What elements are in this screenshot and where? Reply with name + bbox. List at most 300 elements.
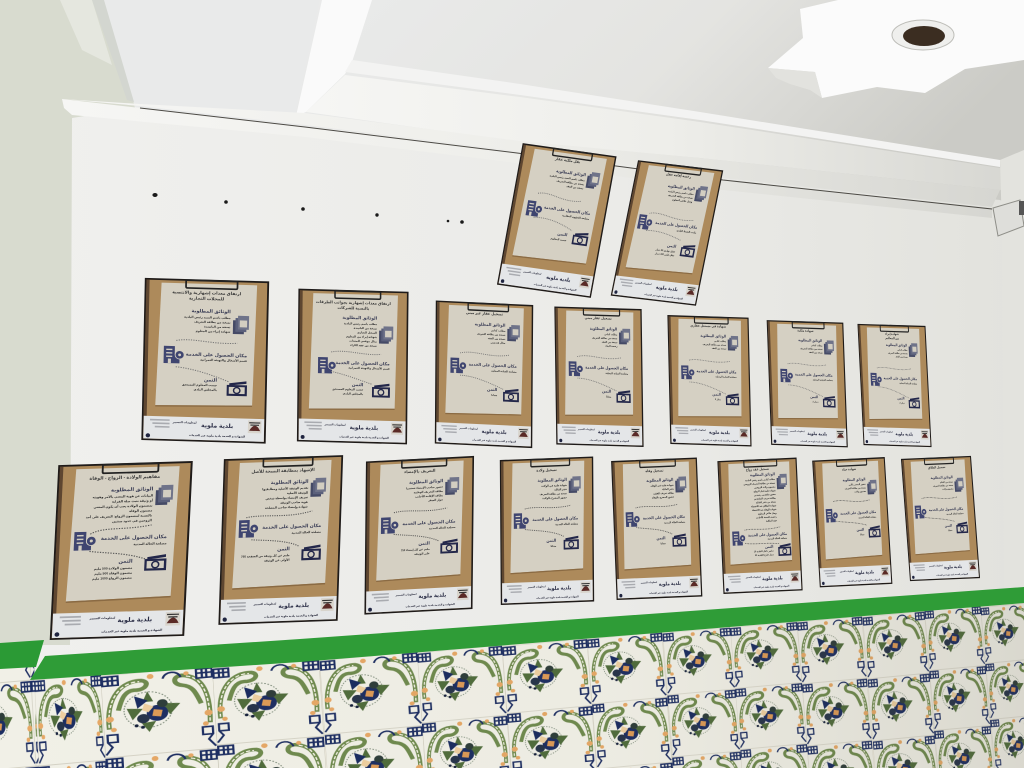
required documents — [548, 166, 600, 192]
price — [856, 525, 881, 538]
footer: بلدية ملوية — [278, 603, 309, 610]
service location — [732, 529, 788, 546]
footer — [789, 430, 835, 444]
dotted route — [922, 496, 957, 500]
service location: قسم الأشغال والتهيئة العمرانية — [200, 358, 247, 363]
board: row 1, property transfer — [498, 143, 616, 297]
required documents — [646, 476, 687, 500]
required documents: حضور المعني بالأمر — [848, 482, 866, 487]
board title: مفاهيم الولادة - الزواج - الوفاة — [89, 474, 160, 481]
required documents: وصل خلاص المعلوم — [672, 198, 693, 204]
ceiling panel — [103, 0, 320, 125]
price: مضمون الزواج 1000 مليم — [92, 576, 132, 581]
footer: بلدية ملوية — [709, 429, 730, 435]
board: row 3, signature certification — [365, 456, 473, 614]
required documents: الوثائق المطلوبة — [409, 478, 444, 485]
footer: الشهادة و الخدمة بلدية ملوية عبر الخدمات — [264, 614, 318, 619]
dotted route — [331, 351, 381, 355]
service location: مكان الحصول على الخدمة — [469, 361, 517, 369]
required documents: أو وثيقة تثبت صلة القرابة — [112, 498, 153, 504]
board title: التعريف بالإمضاء — [404, 469, 435, 475]
required documents: نسخة من بطاقة التعريف — [556, 179, 584, 186]
service location: مكتب الضبط البلدي — [676, 229, 697, 235]
price: حسب المعلوم المستحق — [182, 382, 217, 387]
required documents: تقديم الوثيقة الأصلية ومطابقتها — [262, 486, 308, 491]
required documents — [406, 477, 459, 503]
price — [92, 554, 167, 581]
required documents: مطلب باسم السيد رئيس البلدية — [184, 315, 231, 320]
dotted route — [636, 526, 672, 535]
board title: تسجيل وفاة — [645, 468, 664, 473]
required documents: الوثائق المطلوبة — [886, 343, 907, 348]
board title — [885, 331, 899, 341]
price — [550, 228, 589, 246]
footer: الشهادة و الخدمة بلدية ملوية عبر الخدمات — [800, 440, 835, 444]
board: row 2, property use certificate — [668, 315, 751, 446]
service location: مصلحة الحالة المدنية — [133, 541, 167, 546]
price: حفل ليلي 100 دينار — [654, 252, 675, 257]
footer: الشهادة و الخدمة بلدية ملوية عبر الخدمات — [701, 438, 738, 443]
required documents: الوثائق المطلوبة — [271, 479, 309, 485]
required documents: مطلب كتابي — [897, 348, 908, 352]
service location: مكان الحصول على الخدمة — [544, 204, 591, 216]
required documents: رخصة بالنسبة للأجانب — [756, 514, 778, 519]
required documents: مضمون ولادة — [855, 490, 867, 494]
required documents: بطاقة تعريف الشاهدين — [754, 496, 776, 501]
required documents — [886, 342, 918, 359]
price: 2 دينار — [900, 403, 905, 405]
required documents: عقد الملكية — [766, 519, 778, 523]
footer: الشهادة و الخدمة بلدية ملوية عبر الخدمات — [339, 435, 389, 440]
dotted route — [744, 527, 780, 530]
board title: ارتفاق معدات إشهارية بجوانب الطرقات — [316, 299, 391, 307]
footer: لمعلومات التسيير — [745, 575, 761, 579]
price: مجانا — [551, 545, 557, 548]
service location — [318, 357, 390, 375]
price — [944, 522, 968, 534]
service location: مصلحة الحالة المدنية — [946, 513, 964, 516]
dotted route — [690, 382, 726, 394]
board: row 2, roadside advertising — [298, 289, 408, 444]
price — [656, 533, 687, 547]
dotted route — [394, 508, 447, 513]
price: الثمن — [557, 231, 568, 237]
required documents: شهادة طبية قبل الزواج — [754, 489, 776, 493]
footer: لمعلومات التسيير — [527, 585, 546, 589]
footer: الشهادة و الخدمة بلدية ملوية عبر الخدمات — [847, 578, 881, 583]
footer: الشهادة و الخدمة بلدية ملوية عبر الخدمات — [589, 439, 629, 443]
required documents: شهادة إبراء من المعلوم — [196, 329, 231, 334]
price: مضمون الولادة 500 مليم — [94, 566, 132, 571]
required documents: نسخة من بطاقة التعريف — [800, 347, 823, 351]
required documents: الوثائق المطلوبة — [798, 338, 822, 343]
required documents: مثال موقعي للمعدات — [349, 340, 377, 343]
footer — [88, 614, 163, 634]
board title: بالنسبة للشركات — [337, 305, 370, 311]
footer: بلدية ملوية — [546, 274, 571, 284]
board: row 3, birth registration — [500, 457, 593, 604]
footer: لمعلومات التسيير — [928, 565, 943, 568]
price: الثمن — [204, 377, 218, 384]
required documents: الزوجين في حدود سنتين — [112, 518, 152, 523]
price: 10 دنانير داخل البلدية — [754, 549, 775, 553]
price: الثمن — [810, 395, 818, 399]
required documents: حضور المصرح بالوفاة — [652, 495, 674, 500]
ceiling frame ribbon — [345, 60, 1000, 167]
price: 750 مليم عن كل إمضاء — [401, 547, 430, 552]
required documents — [798, 338, 834, 355]
required documents: نسخة من الحكم — [940, 480, 953, 484]
service location: مصلحة الحالة المدنية — [429, 526, 456, 530]
required documents: حضور شاهدين رشيدين — [754, 493, 776, 497]
board title: تسجيل عقار غير مبني — [466, 311, 504, 317]
left wall section — [0, 0, 135, 645]
footer: الشهادة و الخدمة بلدية ملوية عبر الخدمات — [536, 595, 579, 600]
board title: الإشهاد بمطابقة النسخة للأصل — [251, 467, 315, 474]
dotted route — [537, 192, 582, 202]
right wall corner — [1000, 150, 1024, 590]
service location — [637, 214, 699, 235]
service location: مكان الحصول على الخدمة — [335, 360, 390, 366]
board: row 3, certified copy — [219, 455, 342, 624]
board: row 1, event permit — [611, 160, 723, 305]
price: الثمن — [656, 536, 666, 541]
required documents: نسخة من بطاقة التعريف — [477, 332, 505, 337]
footer: الشهادة و الخدمة بلدية ملوية عبر الخدمات — [936, 572, 969, 577]
footer — [323, 423, 389, 440]
service location — [826, 507, 877, 523]
required documents: البيانات عن هوية المعني بالأمر وهويته — [92, 494, 153, 499]
required documents — [930, 474, 964, 493]
footer — [632, 281, 686, 301]
price: الثمن — [944, 523, 952, 528]
board title — [172, 289, 242, 302]
footer: بلدية ملوية — [481, 429, 507, 436]
price: بالمجلس البلدي — [194, 387, 217, 392]
footer: بلدية ملوية — [855, 569, 874, 575]
service location — [74, 529, 167, 551]
dotted route — [525, 505, 571, 509]
board title: تسجيل عقد زواج — [746, 467, 769, 472]
footer: بلدية ملوية — [659, 580, 681, 587]
service location: مكان الحصول على الخدمة — [532, 515, 579, 522]
footer: لمعلومات التسيير — [577, 428, 595, 431]
ceiling light — [892, 20, 954, 50]
dotted route — [578, 378, 616, 391]
board title: من المعاليم — [885, 336, 899, 341]
dotted route — [460, 375, 503, 389]
required documents: نسخة من العقد — [602, 341, 618, 344]
required documents: الوثائق المطلوبة — [342, 315, 378, 321]
service location: مكان الحصول على الخدمة — [929, 506, 964, 513]
tiled dado — [0, 603, 1024, 768]
price: الثمن — [277, 546, 290, 552]
required documents: الوثائق المطلوبة — [667, 184, 695, 191]
price — [182, 377, 247, 396]
ceiling molding — [296, 0, 372, 116]
service location: مصلحة الجباية المحلية — [715, 375, 737, 379]
price — [401, 539, 458, 557]
required documents: نسخة من بطاقة التعريف — [592, 336, 617, 340]
price — [712, 392, 739, 405]
footer — [689, 428, 738, 443]
price — [654, 241, 696, 260]
price: الثمن — [897, 396, 905, 401]
required documents: نسخة من بطاقة التعريف — [540, 492, 567, 496]
dotted route — [175, 367, 230, 382]
dotted route — [689, 359, 730, 363]
dotted route — [90, 525, 152, 534]
price: حفل نهاري 50 دينار — [654, 248, 676, 254]
footer: لمعلومات التسيير — [789, 431, 805, 433]
required documents: الوثائق المطلوبة — [556, 168, 586, 177]
required documents: شهادة وإمضاء صاحب المصلحة — [265, 504, 308, 510]
required documents: مطلب كتابي — [811, 344, 823, 347]
service location: مصلحة الجباية المحلية — [491, 370, 517, 374]
dotted route — [525, 528, 564, 538]
footer: بلدية ملوية — [895, 432, 914, 437]
required documents: نسخة من بطاقة التعريف — [703, 343, 726, 347]
required documents: الوثائق المطلوبة — [537, 477, 567, 483]
dotted route — [788, 363, 826, 366]
price: 2 دينار — [813, 400, 819, 404]
junction box — [993, 200, 1024, 236]
required documents: نسخة من بطاقة التعريف — [668, 194, 693, 200]
service location: مكان الحصول على الخدمة — [101, 534, 167, 542]
dotted route — [394, 532, 438, 543]
required documents: نسخة من بطاقة التعريف — [888, 351, 908, 355]
board: row 2, ownership certificate — [767, 320, 847, 447]
required documents — [184, 308, 249, 334]
required documents: مطلب كتابي — [714, 340, 727, 343]
price — [546, 536, 579, 550]
price — [810, 395, 836, 408]
required documents: شهادة طبية في الوفاة — [651, 484, 674, 488]
panel shadow edge — [92, 0, 134, 102]
price — [241, 544, 321, 563]
service location — [915, 504, 965, 519]
footer: بلدية ملوية — [655, 284, 679, 292]
dotted route — [577, 355, 621, 359]
footer: لمعلومات التسيير — [324, 423, 346, 427]
footer: بلدية ملوية — [807, 431, 828, 437]
required documents: الوثائق المطلوبة — [111, 486, 154, 494]
price: الثمن — [667, 244, 677, 249]
service location: مكان الحصول على الخدمة — [655, 221, 698, 230]
required documents: نسخة من العقد — [809, 351, 823, 355]
board title — [316, 299, 391, 311]
footer: الشهادة و الخدمة بلدية ملوية عبر الخدمات — [101, 628, 162, 634]
required documents: الوثائق المطلوبة — [750, 472, 775, 477]
footer: لمعلومات التسيير — [172, 421, 197, 425]
required documents: الوثائق المطلوبة — [646, 478, 673, 483]
dotted route — [836, 520, 867, 527]
price: الثمن — [602, 389, 611, 394]
service location: مكان الحصول على الخدمة — [643, 515, 685, 521]
required documents: شهادة الطلاق عند الاقتضاء — [751, 504, 776, 508]
ceiling star fixture — [768, 0, 1024, 98]
footer: بلدية ملوية — [944, 563, 963, 570]
price: مجانا — [660, 542, 666, 545]
footer: بلدية ملوية — [418, 593, 446, 600]
price: الثمن — [418, 540, 430, 546]
board title: شهادة ملكية — [797, 328, 814, 333]
footer — [395, 591, 455, 609]
required documents: مطلب باسم رئيس البلدية — [668, 190, 695, 196]
price: الثمن — [118, 559, 133, 565]
board title: للمحلات التجارية — [189, 296, 225, 301]
required documents: للوثيقة الأصلية — [287, 490, 308, 495]
required documents: نسخة من العقد — [895, 355, 908, 359]
cornice — [62, 99, 1000, 207]
board: row 3, marriage contract — [718, 458, 802, 593]
footer: لمعلومات التسيير — [522, 270, 542, 276]
required documents: مضمون الوفاة — [129, 508, 152, 513]
dotted route — [878, 387, 909, 398]
service location — [381, 514, 456, 534]
price: بالمجلس البلدي — [343, 392, 363, 396]
dotted route — [925, 516, 955, 523]
footer — [171, 421, 246, 439]
required documents: الوثائق المطلوبة — [930, 475, 953, 480]
service location: مكان الحصول على الخدمة — [585, 365, 628, 371]
dotted route — [877, 367, 911, 370]
service location: مكان الحصول على الخدمة — [696, 369, 737, 374]
required documents: مطلب كتابي باسم رئيس البلدية — [745, 478, 776, 482]
required documents — [842, 476, 877, 496]
service location: مكان الحصول على الخدمة — [795, 372, 833, 379]
footer: لمعلومات التسيير — [252, 602, 276, 606]
wall holes — [152, 193, 464, 224]
price — [332, 381, 390, 398]
dotted route — [788, 385, 823, 397]
footer: الشهادة و الخدمة بلدية ملوية عبر الخدمات — [649, 590, 688, 595]
footer: لمعلومات التسيير — [395, 593, 417, 597]
footer — [527, 584, 579, 600]
service location: مصلحة الشؤون العقارية — [562, 214, 590, 221]
required documents: نسخة من عقد الكراء — [350, 343, 377, 348]
price — [897, 396, 920, 409]
service location: مكان الحصول على الخدمة — [186, 352, 247, 359]
dotted route — [532, 217, 574, 231]
footer — [577, 428, 629, 443]
footer — [520, 270, 579, 292]
required documents: بطاقة الإقامة للأجانب — [415, 493, 443, 499]
price: الأولى عن الوثيقة — [264, 558, 290, 563]
required documents: الوثائق المطلوبة — [590, 327, 617, 332]
footer: الشهادة و الخدمة بلدية ملوية عبر الخدمات — [644, 293, 683, 301]
required documents: حضور صاحب الإمضاء شخصيا — [406, 485, 443, 490]
price: مجانا — [948, 530, 953, 532]
price: 750 مليم عن كل وثيقة من الصفحة — [241, 553, 290, 559]
required documents: شهادة طبية في الولادة — [541, 484, 568, 488]
board: row 3, life certificate — [813, 457, 892, 587]
footer: لمعلومات التسيير — [879, 431, 893, 434]
price: 30 دينار خارج البلدية — [755, 553, 775, 557]
footer: لمعلومات التسيير — [640, 581, 657, 585]
dotted route — [745, 542, 780, 545]
service location — [525, 200, 592, 224]
service location — [626, 510, 686, 527]
required documents: نسخة من العقد — [566, 185, 584, 190]
lower ceiling band — [306, 75, 1024, 190]
service location: مصلحة الجباية المحلية — [813, 378, 833, 382]
required documents: دفتر العائلة — [662, 487, 675, 491]
required documents — [700, 334, 738, 351]
footer: لمعلومات التسيير — [839, 570, 854, 573]
footer — [879, 431, 921, 444]
price: مجانا — [860, 533, 865, 536]
footer: لمعلومات التسيير — [634, 281, 652, 286]
board title: شهادة حياة — [842, 467, 856, 472]
footer: لمعلومات التسيير — [458, 427, 478, 431]
footer: الشهادة و الخدمة بلدية ملوية عبر الخدمات — [405, 603, 455, 608]
service location: مصلحة الجباية المحلية — [899, 383, 918, 386]
required documents: دفتر العائلة — [554, 488, 568, 492]
price — [754, 543, 791, 557]
service location: مكان الحصول على الخدمة — [402, 519, 456, 526]
price — [487, 386, 519, 402]
footer: لمعلومات التسيير — [689, 428, 706, 432]
footer — [458, 427, 516, 444]
price: مضمون الوفاة 500 مليم — [94, 571, 132, 576]
required documents: مثال هندسي — [490, 341, 506, 345]
required documents — [537, 476, 581, 500]
service location: مصلحة الحالة المدنية — [664, 520, 686, 525]
required documents — [262, 478, 326, 510]
board: row 3, death registration — [612, 458, 702, 599]
service location: مصلحة الحالة المدنية — [555, 522, 579, 526]
service location: قسم الأشغال والتهيئة العمرانية — [348, 366, 390, 371]
footer — [252, 601, 319, 619]
footer: الشهادة و الخدمة بلدية ملوية عبر الخدمات — [754, 584, 790, 589]
required documents: نسخة من بطاقة التعريف للزوجين — [743, 481, 775, 486]
footer: بلدية ملوية — [762, 575, 783, 581]
required documents: شهادة الوفاة عند الاقتضاء — [752, 508, 777, 512]
price: الثمن — [712, 392, 721, 397]
required documents: بمضمون الولادة يجب أن يكون المعني — [93, 503, 153, 509]
required documents — [85, 485, 173, 524]
required documents: رخصة البناء — [606, 345, 618, 348]
service location: مكان الحصول على الخدمة — [262, 523, 321, 530]
cornice shadow line — [140, 108, 992, 209]
required documents: مطلب باسم السيد رئيس البلدية — [549, 174, 586, 182]
dotted route — [176, 339, 238, 344]
required documents: بطاقة التعريف الوطنية — [414, 490, 443, 494]
required documents: جواز السفر — [427, 498, 443, 502]
service location: مكان الحصول على الخدمة — [748, 532, 787, 538]
dotted route — [636, 504, 678, 508]
green ledge main — [30, 587, 1024, 680]
price: مجانا — [606, 395, 612, 399]
required documents: الوثائق المطلوبة — [191, 308, 231, 315]
service location: مصلحة الجباية المحلية — [605, 372, 629, 376]
footer: الشهادة و الخدمة بلدية ملوية عبر الخدمات — [889, 440, 921, 444]
service location: مصلحة الحالة المدنية — [858, 515, 877, 519]
board title: نقل ملكية عقار — [554, 157, 581, 164]
price: حسب المعلوم — [550, 237, 567, 242]
required documents: مضمون ولادة — [942, 487, 954, 491]
required documents — [342, 315, 393, 348]
service location — [239, 518, 322, 538]
board: row 2, built property — [555, 307, 643, 446]
required documents: حضور المصرح بالولادة — [542, 496, 567, 500]
price: الثمن — [765, 544, 774, 549]
required documents: نسخة من العقد — [712, 347, 727, 351]
board title: تسجيل ولادة — [536, 468, 557, 473]
dotted route — [833, 499, 870, 503]
footer: بلدية ملوية — [350, 425, 378, 432]
